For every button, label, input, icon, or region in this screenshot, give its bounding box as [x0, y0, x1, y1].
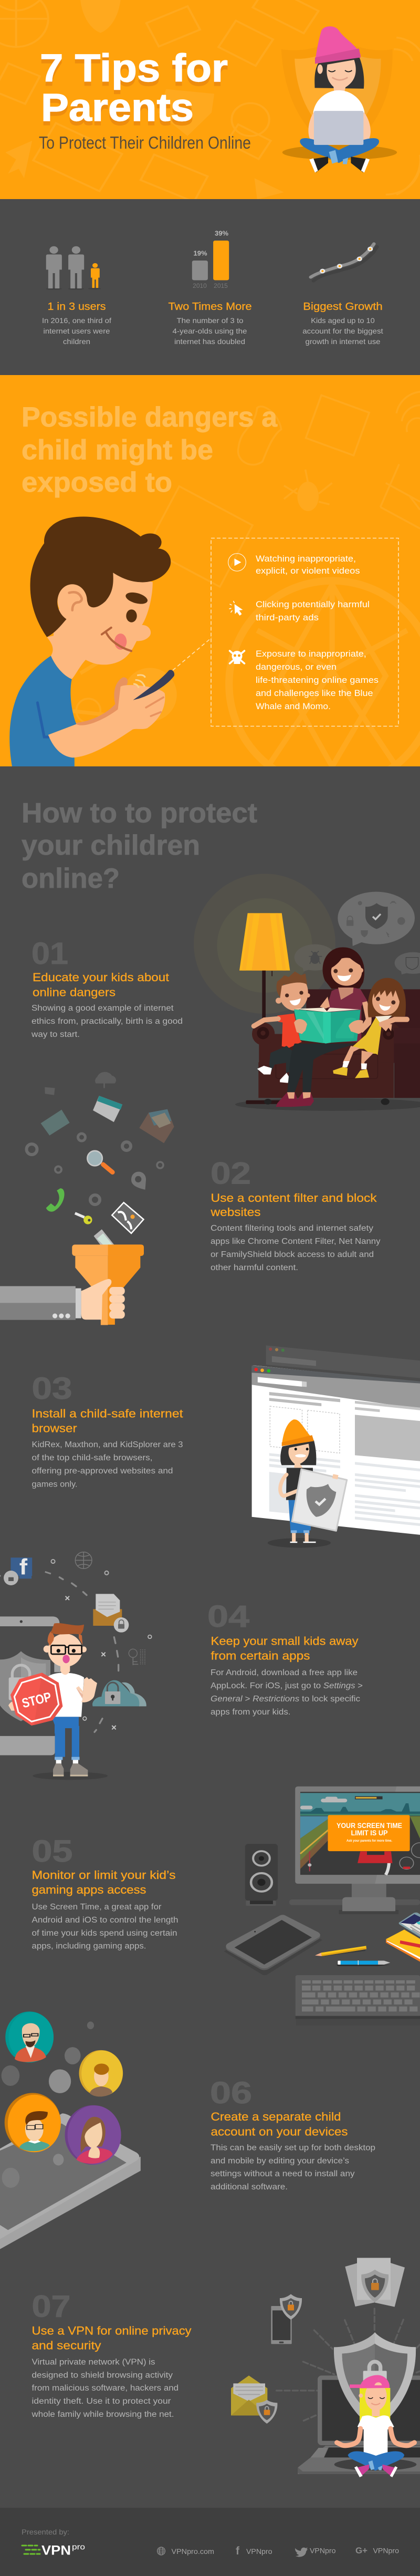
heading: vpn [32, 2324, 192, 2352]
heading: filter: Use a content filter and block [211, 1191, 377, 1204]
illustration: desk with monitor [224, 1786, 420, 2026]
tip 02 [0, 1072, 381, 1325]
heading: apps: Keep your small kids away [211, 1635, 359, 1648]
icon: click cursor [229, 601, 243, 616]
message: screen time limit: LIMIT IS UP [351, 1829, 387, 1837]
text: two times more: The number of 3 to [176, 316, 244, 325]
body: educate: Showing a good example of internet [32, 1004, 174, 1013]
heading: browser: Install a child-safe internet [32, 1407, 183, 1420]
text: games: life-threatening online games [256, 676, 379, 685]
icon: play video [228, 554, 246, 571]
bar chart: 2010 vs 2015: 2010 [193, 282, 207, 289]
illustration: boy with stop sign: STOP [20, 1689, 53, 1711]
bar chart: 2010 vs 2015: 2015 [214, 282, 228, 289]
text: 1 in 3 users: children [63, 337, 90, 346]
heading: browser [32, 1407, 183, 1435]
heading: possible dangers: exposed to [22, 467, 172, 498]
heading: how to protect: How to to protect [22, 797, 257, 829]
link: facebook [236, 2545, 272, 2557]
link: google plus: VPNpro [373, 2547, 399, 2555]
text: games: dangerous, or even [256, 662, 337, 672]
tip 05 [32, 1786, 420, 2026]
heading: possible dangers: child might be [22, 435, 213, 465]
body: vpn: identity theft. Use it to protect your [32, 2397, 171, 2406]
heading: account: Create a separate child [211, 2110, 341, 2123]
text: videos [256, 554, 360, 576]
text: videos: explicit, or violent videos [256, 566, 360, 576]
text: 1 in 3 users: In 2016, one third of [42, 316, 111, 325]
body: educate: way to start. [31, 1030, 80, 1039]
text: two times more [168, 301, 252, 346]
body: vpn: whole family while browsing the net. [31, 2410, 174, 2419]
icon: skull [230, 651, 245, 664]
link: facebook: VPNpro [246, 2547, 272, 2556]
text: biggest growth: Kids aged up to 10 [311, 316, 375, 325]
text: 1 in 3 users: internet users were [43, 327, 110, 335]
number 01: 01 [32, 937, 68, 971]
text: 1 in 3 users: 1 in 3 users [47, 301, 106, 313]
heading: gaming [32, 1868, 175, 1896]
text: ads: third-party ads [256, 613, 319, 622]
heading: vpn: and security [32, 2339, 101, 2352]
body: browser: KidRex, Maxthon, and KidSplorer are 3 [32, 1440, 183, 1449]
body: vpn: from malicious software, hackers and [32, 2384, 178, 2393]
text: videos: Watching inappropriate, [256, 554, 356, 564]
body: gaming: Android and iOS to control the length [32, 1916, 178, 1925]
body: account: additional software. [211, 2183, 288, 2191]
logo: VPNpro: pro [72, 2542, 85, 2552]
illustration: browser window and girl [252, 1345, 420, 1547]
text: games: Exposure to inappropriate, [256, 649, 366, 659]
body: filter [211, 1224, 381, 1272]
bar chart: 2010 vs 2015 [192, 229, 229, 289]
body: gaming: of time your kids spend using certain [32, 1929, 177, 1938]
desk items: tablet, pencil, pen, notebook, phone [224, 1913, 420, 1975]
keyboard [296, 1975, 420, 2026]
title: Parents [41, 86, 194, 129]
text: games [256, 649, 379, 711]
subtitle: To Protect Their Children Online [39, 133, 251, 152]
tip 03 [32, 1345, 420, 1547]
link: google plus [355, 2546, 399, 2556]
heading: apps: from certain apps [211, 1649, 310, 1662]
body: gaming [32, 1903, 178, 1951]
text: games: and challenges like the Blue [256, 689, 373, 698]
illustration: phone with user avatars [0, 2011, 141, 2249]
number 06: 06 [210, 2076, 252, 2110]
panel: hero header [0, 0, 420, 202]
body: account: settings without a need to install any [211, 2169, 355, 2178]
tip 07 [31, 2258, 420, 2477]
background pattern: dangers outlines [70, 392, 420, 787]
number 07: 07 [32, 2289, 70, 2324]
body: filter: other harmful content. [211, 1263, 298, 1272]
text: two times more: internet has doubled [174, 337, 245, 346]
text: games: Whale and Momo. [256, 702, 331, 711]
link: website: VPNpro.com [171, 2547, 214, 2556]
text: biggest growth: growth in internet use [306, 337, 381, 346]
heading: how to protect [22, 797, 257, 894]
link: twitter [295, 2547, 336, 2557]
panel: footer [0, 2508, 420, 2576]
body: filter: Content filtering tools and internet safety [211, 1224, 373, 1233]
panel: possible dangers [0, 375, 420, 787]
body: account: This can be easily set up for both desktop [211, 2143, 375, 2152]
heading: account [211, 2110, 348, 2138]
title [40, 46, 228, 129]
icon: adults and child [46, 246, 101, 290]
illustration: family on sofa [194, 874, 420, 1111]
text: presented by: Presented by: [22, 2528, 69, 2536]
tip 06 [0, 2011, 375, 2249]
text: 1 in 3 users [42, 301, 111, 346]
body: gaming: Use Screen Time, a great app for [32, 1903, 162, 1912]
body: browser: offering pre-approved websites and [32, 1467, 173, 1476]
link: facebook: f [236, 2545, 240, 2557]
panel: statistics [0, 199, 420, 375]
text: biggest growth [302, 301, 383, 346]
body: gaming: apps, including gaming apps. [32, 1941, 146, 1951]
title: 7 Tips for [40, 46, 228, 90]
heading: gaming: Monitor or limit your kid’s [32, 1868, 175, 1882]
text: two times more: 4-year-olds using the [172, 327, 247, 335]
illustration: boy with phone [9, 517, 174, 766]
background pattern: hero outlines [0, 0, 420, 202]
heading: filter [210, 1191, 377, 1219]
heading: educate: Educate your kids about [33, 971, 170, 984]
number 04: 04 [207, 1599, 249, 1634]
heading: gaming: gaming apps access [32, 1883, 146, 1896]
heading: account: account on your devices [211, 2125, 348, 2138]
tip 04 [0, 1552, 363, 1780]
body: vpn: designed to shield browsing activity [32, 2371, 173, 2380]
number 05: 05 [32, 1834, 72, 1868]
message: screen time limit: Ask your parents for more time. [346, 1839, 392, 1843]
number 02: 02 [211, 1157, 251, 1190]
heading: educate: online dangers [33, 985, 116, 999]
body: apps: AppLock. For iOS, just go to Settings > [211, 1681, 363, 1690]
callout: dangers list [211, 538, 398, 726]
heading: possible dangers [22, 402, 278, 498]
body: educate [31, 1004, 183, 1039]
body: educate: ethics from, practically, birth is a good [32, 1017, 183, 1026]
logo: VPNpro [22, 2542, 85, 2558]
text: biggest growth: account for the biggest [302, 327, 383, 335]
body: filter: apps like Chrome Content Filter, Net Nanny [211, 1237, 381, 1246]
connector: dashed line to callout [173, 638, 212, 670]
link: google plus: G+ [355, 2546, 368, 2556]
heading: how to protect: online? [22, 863, 120, 894]
panel: how to protect [0, 766, 420, 2508]
heading: educate [33, 971, 170, 999]
heading: vpn: Use a VPN for online privacy [32, 2324, 192, 2338]
body: filter: or FamilyShield block access to adult and [211, 1250, 374, 1259]
heading: possible dangers: Possible dangers a [22, 402, 278, 433]
text: ads: Clicking potentially harmful [256, 600, 370, 609]
message: screen time limit: YOUR SCREEN TIME [337, 1822, 402, 1830]
number 03: 03 [32, 1372, 72, 1406]
body: apps: General > Restrictions to lock specific [211, 1695, 360, 1704]
heading: apps [211, 1635, 359, 1662]
body: vpn: Virtual private network (VPN) is [32, 2357, 155, 2367]
text: ads [256, 600, 370, 622]
body: browser [32, 1440, 183, 1489]
body: apps [211, 1668, 363, 1717]
illustration: boy with stop sign: f [19, 1554, 28, 1581]
line chart: growth [311, 244, 377, 281]
illustration: boy with stop sign [0, 1552, 152, 1780]
illustration: VPN shield and meditating girl [231, 2258, 420, 2477]
body: account: and mobile by editing your device’s [211, 2156, 349, 2165]
body: account [211, 2143, 375, 2191]
illustration: girl with laptop and shield [281, 26, 397, 173]
bar chart: 2010 vs 2015: 39% [215, 229, 228, 237]
text: two times more: Two Times More [168, 301, 252, 313]
body: browser: games only. [32, 1480, 78, 1489]
illustration: funnel filtering icons [0, 1072, 174, 1325]
body: vpn [31, 2357, 178, 2419]
bar chart: 2010 vs 2015: 19% [193, 249, 207, 257]
body: apps: For Android, download a free app like [211, 1668, 358, 1677]
text: biggest growth: Biggest Growth [303, 301, 383, 313]
link: twitter: VPNpro [310, 2547, 336, 2555]
heading: filter: websites [210, 1206, 260, 1219]
message: screen time limit [337, 1822, 402, 1843]
heading: how to protect: your children [22, 830, 200, 861]
heading: browser: browser [32, 1421, 77, 1435]
logo: VPNpro: VPN [41, 2543, 71, 2558]
body: apps: apps from your kids. [211, 1708, 291, 1717]
body: browser: of the top child-safe browsers, [32, 1453, 152, 1462]
tip 01 [31, 874, 420, 1111]
